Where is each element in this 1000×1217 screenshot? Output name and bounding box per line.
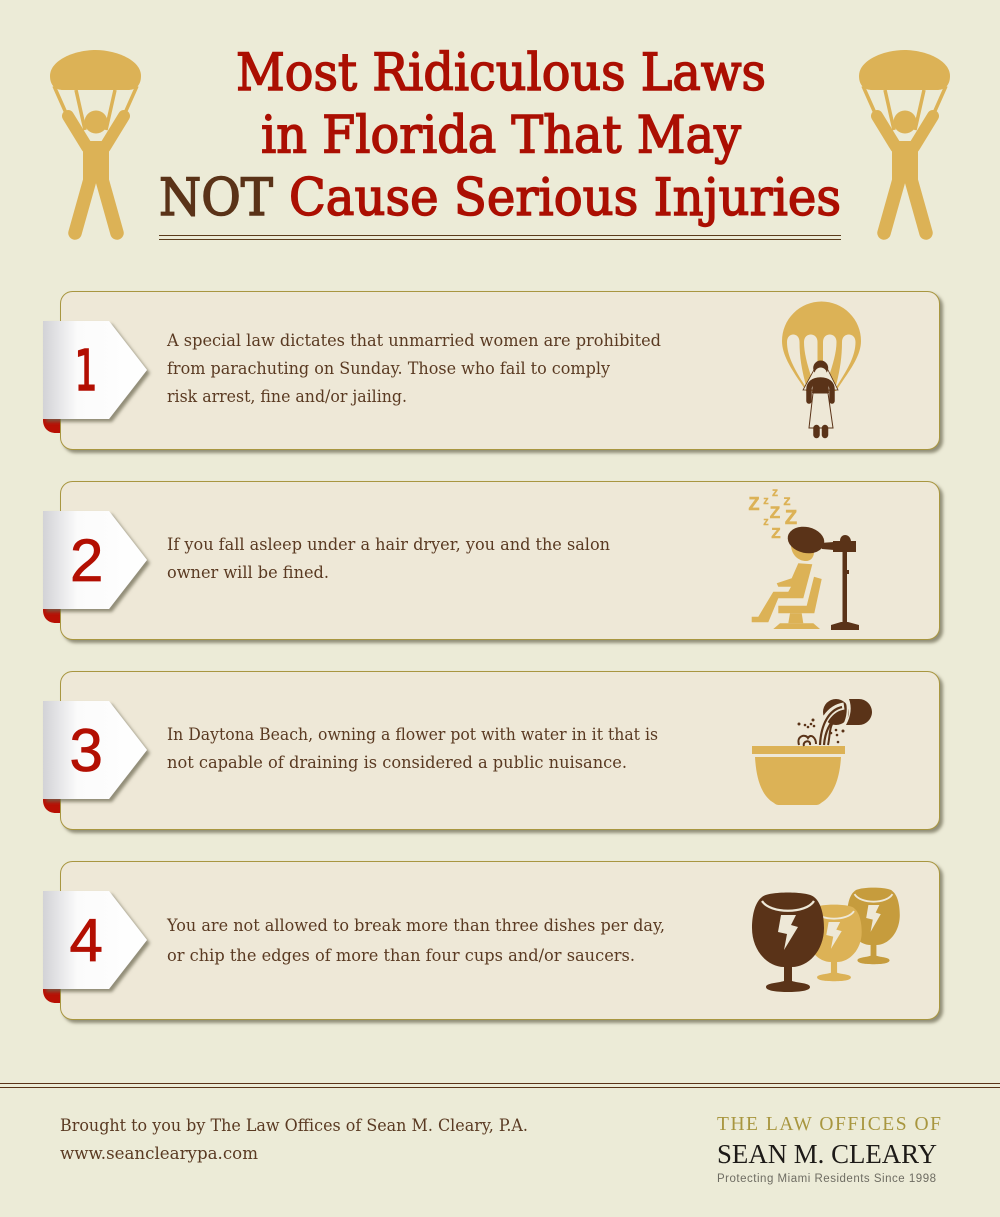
- ribbon: number 3: [43, 701, 147, 813]
- text: law 4: [166, 916, 665, 965]
- panel: law 2: [43, 482, 940, 640]
- title: Cause Serious Injuries: [289, 169, 841, 228]
- logo: law offices: Protecting Miami Residents Since 1998: [717, 1173, 936, 1185]
- title: in Florida That May: [261, 106, 741, 166]
- footer credit: [60, 1116, 528, 1163]
- text: law 4: You are not allowed to break more than three dishes per day,: [166, 916, 665, 935]
- text: law 2: owner will be fined.: [167, 563, 329, 582]
- ribbon: number 4: 4: [70, 907, 103, 974]
- text: law 3: In Daytona Beach, owning a flower pot with water in it that is: [167, 725, 658, 744]
- icon: sleeping under hair dryer: Z: [770, 503, 780, 522]
- logo: law offices: THE LAW OFFICES OF: [717, 1114, 941, 1135]
- logo: law offices: [717, 1114, 941, 1185]
- text: law 1: A special law dictates that unmarried women are prohibited: [166, 331, 661, 350]
- text: law 1: [166, 331, 661, 406]
- icon: sleeping under hair dryer: Z: [785, 507, 797, 529]
- ribbon: number 3: 3: [70, 717, 103, 784]
- icon: sleeping under hair dryer: [748, 488, 859, 630]
- icon: sleeping under hair dryer: Z: [772, 488, 778, 498]
- text: law 4: or chip the edges of more than four cups and/or saucers.: [167, 946, 635, 965]
- icon: right parachutist: [859, 50, 950, 233]
- footer credit: Brought to you by The Law Offices of Sean M. Cleary, P.A.: [60, 1116, 528, 1135]
- icon: sleeping under hair dryer: Z: [771, 525, 781, 542]
- text: law 2: [167, 535, 610, 582]
- icon: sleeping under hair dryer: Z: [764, 497, 769, 506]
- icon: pouring water into flower pot: [752, 699, 872, 805]
- text: law 2: If you fall asleep under a hair dryer, you and the salon: [167, 535, 610, 554]
- icon: bride with parachute: [782, 302, 861, 435]
- icon: broken glasses: [752, 888, 900, 992]
- ribbon: number 1: 1: [74, 339, 98, 404]
- icon: left parachutist: [50, 50, 141, 233]
- icon: sleeping under hair dryer: Z: [748, 494, 760, 514]
- ribbon: number 2: 2: [70, 527, 103, 594]
- title: NOT: [159, 169, 273, 228]
- text: law 1: from parachuting on Sunday. Those who fail to comply: [167, 359, 611, 378]
- text: law 3: [167, 725, 658, 772]
- ribbon: number 4: [43, 891, 147, 1003]
- icon: sleeping under hair dryer: Z: [784, 496, 791, 508]
- logo: law offices: SEAN M. CLEARY: [717, 1138, 937, 1169]
- panel: law 3: [43, 672, 940, 830]
- text: law 1: risk arrest, fine and/or jailing.: [167, 387, 407, 406]
- panel: law 4: [43, 862, 940, 1020]
- panel: law 1: [43, 292, 940, 450]
- ribbon: number 1: [43, 321, 147, 433]
- title: Most Ridiculous Laws: [236, 44, 766, 103]
- icon: sleeping under hair dryer: Z: [764, 518, 769, 527]
- title: [159, 44, 841, 228]
- footer credit: www.seanclearypa.com: [60, 1144, 258, 1163]
- ribbon: number 2: [43, 511, 147, 623]
- text: law 3: not capable of draining is considered a public nuisance.: [167, 753, 627, 772]
